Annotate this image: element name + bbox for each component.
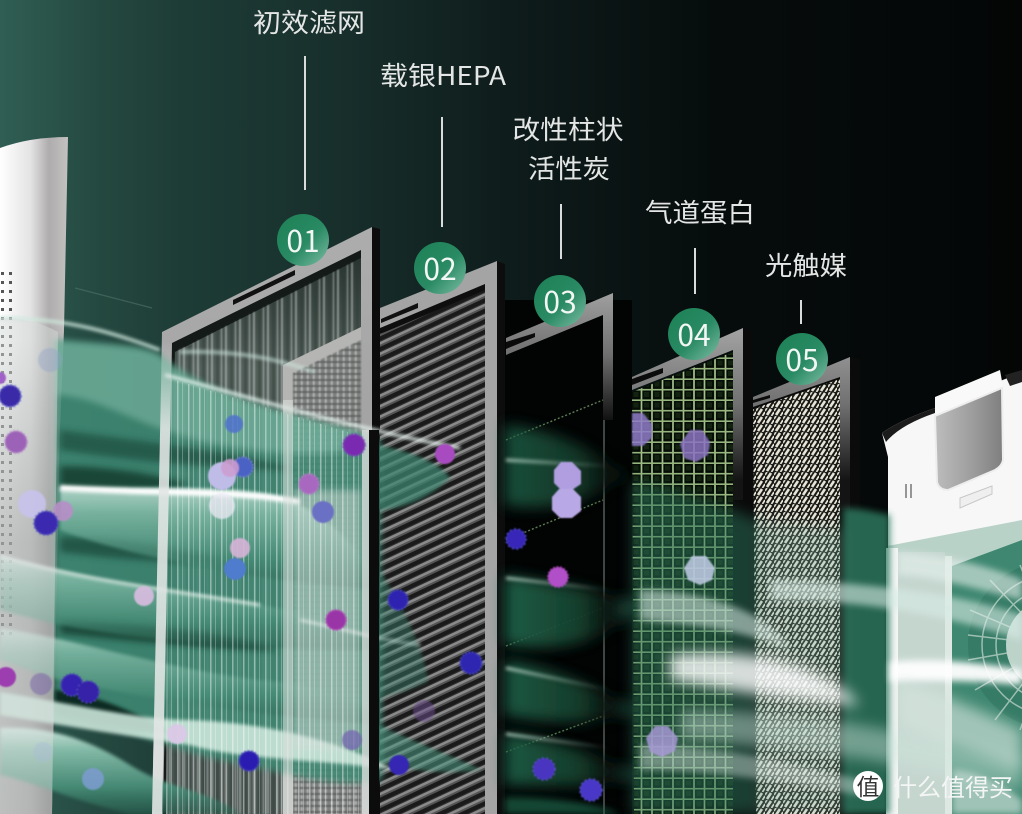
filter 01: primary filter	[152, 227, 380, 814]
badge 05: 05	[785, 336, 819, 380]
badge 03: 03	[543, 278, 577, 322]
watermark: 值	[856, 768, 880, 802]
translucent frame strips	[152, 340, 505, 814]
purifier fan	[968, 561, 1022, 730]
label: photocatalyst: 光触媒	[765, 246, 847, 283]
pale wash on tower column	[0, 318, 58, 814]
badge 01	[277, 214, 329, 266]
leader lines	[305, 56, 801, 324]
badge 04	[668, 308, 720, 360]
viruses and particles: right	[506, 413, 715, 801]
label: silver HEPA: 载银HEPA	[380, 56, 506, 93]
airflow lens shapes on filter 02	[379, 445, 482, 772]
label: airway protein: 气道蛋白	[645, 193, 755, 230]
pale wash over filter 01 inner mesh	[166, 378, 361, 814]
label: modified columnar activated carbon: 改性柱状	[512, 110, 624, 147]
badge 04: 04	[677, 311, 711, 355]
watermark: 什么值得买	[893, 768, 1013, 803]
badge 02	[414, 242, 466, 294]
label: primary filter: 初效滤网	[253, 3, 365, 40]
label: modified columnar activated carbon	[512, 110, 624, 186]
right air purifier body	[882, 370, 1022, 814]
airflow bands: right side	[505, 425, 1022, 814]
badge 02: 02	[423, 245, 457, 289]
viruses and particles: left	[0, 348, 482, 790]
badge 03	[534, 275, 586, 327]
filter 05: photocatalyst	[752, 357, 860, 814]
airflow base and bands: left side	[0, 318, 460, 814]
filter 04: airway protein	[632, 328, 752, 814]
left air purifier tower	[0, 137, 68, 814]
label: modified columnar activated carbon: 活性炭	[528, 149, 610, 186]
badge 05	[776, 333, 828, 385]
badge 01: 01	[286, 217, 320, 261]
filter 03: modified activated carbon	[505, 293, 632, 814]
filter 02: silver HEPA	[380, 261, 505, 814]
